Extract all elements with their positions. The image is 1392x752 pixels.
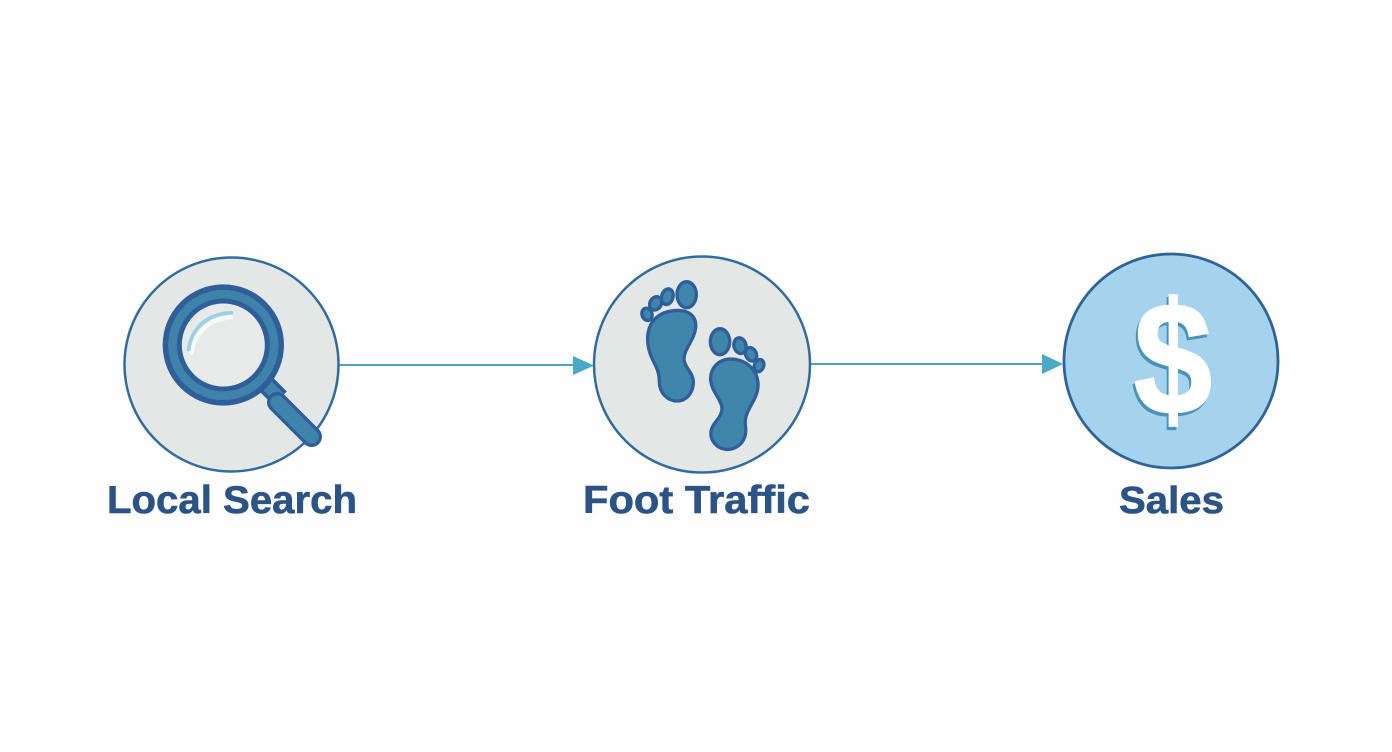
panel: local search [107,258,357,522]
circle: local search background [124,258,338,472]
arrow: foot traffic to sales [810,354,1063,374]
icon: dollar sign: $ [1134,270,1212,448]
right foot [710,329,766,449]
panel: foot traffic [583,256,810,522]
label: foot traffic: Foot Traffic [583,479,810,522]
arrow: local search to foot traffic [339,356,594,375]
label: sales: Sales [1119,480,1224,522]
label: local search: Local Search [107,479,357,522]
circle: foot traffic background [594,256,810,472]
left foot [640,282,696,401]
icon: magnifying glass [165,287,312,437]
icon: dollar sign: $ [1132,273,1210,451]
icon: footprints [640,282,766,449]
panel: sales [1064,254,1278,522]
circle: sales background [1064,254,1278,468]
